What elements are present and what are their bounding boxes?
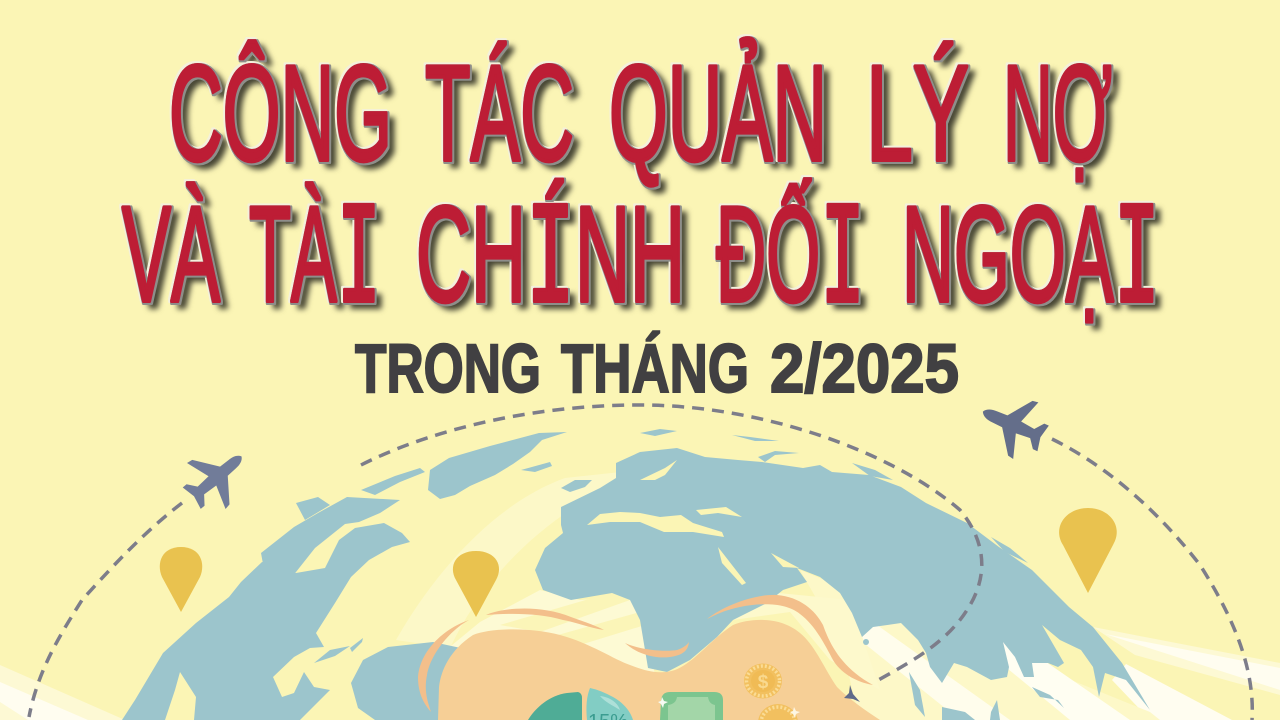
islands: Britain, Arctic and Pacific <box>561 429 1064 720</box>
title: ĐỐI <box>716 178 865 345</box>
title: VÀ <box>122 178 220 330</box>
continent: Greenland <box>428 432 567 499</box>
icon: coin upper: $ <box>758 672 769 693</box>
title <box>122 37 1160 345</box>
subtitle: 2/2025 <box>770 330 959 407</box>
icon: small plane on blob <box>844 685 860 702</box>
orange blob <box>438 620 880 720</box>
icon: coin lower <box>758 704 800 720</box>
continent: South America <box>351 642 470 720</box>
continent: Arctic islands <box>261 462 552 575</box>
title: CHÍNH <box>416 178 685 345</box>
title: TÁC <box>425 37 574 189</box>
subtitle: THÁNG <box>561 330 749 407</box>
icon: map pin right <box>1059 508 1117 593</box>
icon: coin upper <box>744 664 782 698</box>
title: TÀI <box>249 178 381 345</box>
globe: continents <box>122 429 1150 720</box>
icon: pie chart with 15% slice <box>528 688 633 720</box>
peach arcs <box>418 595 873 712</box>
title: NỢ <box>1003 37 1112 189</box>
title: CÔNG <box>169 37 392 189</box>
dashed flight path: left <box>29 503 182 717</box>
icon: map pin left <box>160 547 202 612</box>
light rays behind globe <box>0 470 1280 720</box>
subtitle: TRONG <box>355 330 541 407</box>
icon: map pin centre <box>453 551 499 617</box>
icon: plane right <box>970 383 1056 467</box>
icon: banknote <box>658 692 723 720</box>
subtitle <box>355 330 959 407</box>
seas cut into the landmass <box>587 460 799 585</box>
title: LÝ <box>866 37 969 189</box>
icon: plane left <box>172 433 261 521</box>
dashed flight path: over globe <box>361 405 982 683</box>
continent: Eurasia and Africa <box>535 448 1150 710</box>
continent: North America <box>122 523 410 720</box>
dashed flight path: right <box>1052 439 1252 720</box>
title: QUẢN <box>609 37 827 189</box>
islands: Caribbean <box>314 638 363 663</box>
